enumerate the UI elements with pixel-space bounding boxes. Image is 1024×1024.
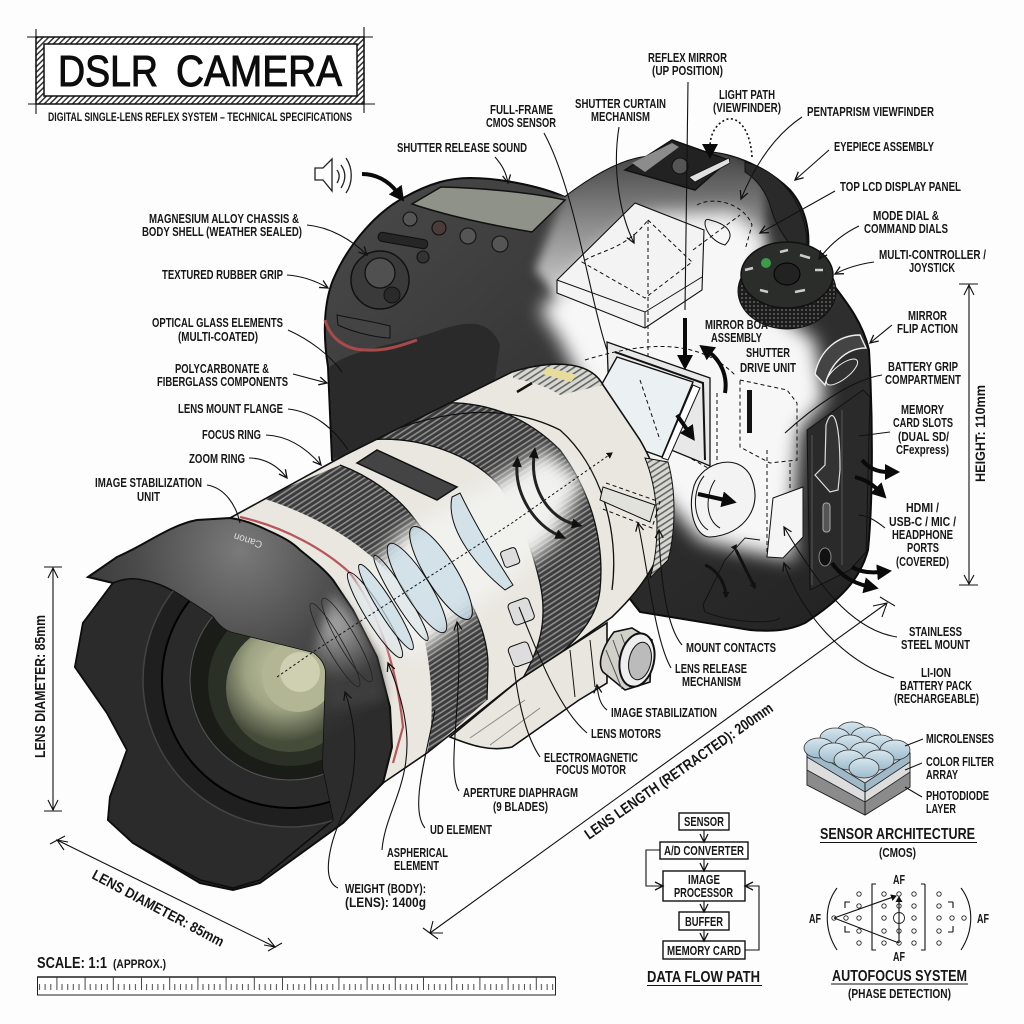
sensor block [804,722,910,815]
label: electromagnetic motor: ELECTROMAGNETIC [544,751,638,765]
AF field arcs and brackets [827,884,971,950]
label: microlenses: MICROLENSES [926,732,994,746]
arrow: base 1 [705,565,726,597]
label: UD element: UD ELEMENT [430,823,492,837]
label: polycarbonate: FIBERGLASS COMPONENTS [157,375,288,389]
arrow: port 1 [852,567,880,572]
AF labels: AF [809,912,821,926]
label: stainless mount: STAINLESS [909,625,962,639]
label: mode dial: COMMAND DIALS [864,222,948,236]
hood brand: Canon [233,530,264,550]
label: lens motors: LENS MOTORS [591,727,661,741]
label: optical glass [152,316,342,372]
cutaway white area [540,212,825,560]
top LCD [412,187,565,232]
heading: (PHASE DETECTION) [848,987,951,1001]
IS rail [600,483,660,528]
flow arrows [646,830,759,950]
label: battery pack: BATTERY PACK [900,679,972,693]
label: mount contacts [659,530,776,655]
label: memory slots: MEMORY [901,403,945,417]
thin ghost elements [304,594,379,691]
label: image stabilization [597,685,717,720]
label: focus ring: FOCUS RING [202,428,261,442]
label: aperture [454,622,578,814]
label: eyepiece [795,140,934,180]
scale: (APPROX.) [113,959,166,971]
label: image stabilization unit: UNIT [137,490,160,504]
label: mount contacts: MOUNT CONTACTS [686,641,776,655]
battery shape [767,487,803,558]
label: memory slots [859,403,953,457]
label: light path [713,88,781,115]
diagram: data flow path [646,813,762,986]
label: light path: (VIEWFINDER) [713,101,781,115]
label: lens release [638,523,747,689]
box: memory card [663,941,745,959]
label: shutter drive: DRIVE UNIT [740,361,796,375]
label: ports: HEADPHONE [892,528,953,542]
tripod foot [450,623,659,749]
label: battery pack: (RECHARGEABLE) [894,692,979,706]
label: stainless mount [784,527,970,652]
label: aspherical: ELEMENT [394,859,439,873]
mode dial [738,242,836,329]
box: converter: A/D CONVERTER [664,844,744,858]
label: magnesium alloy: BODY SHELL (WEATHER SEALED) [142,225,302,239]
arrow: centre body [698,494,725,500]
right hump shading [535,145,825,560]
right callouts [784,309,979,706]
rear lens mount ring [645,458,674,578]
label: photodiode: PHOTODIODE [926,789,989,803]
label: zoom ring [189,452,287,478]
label: electromagnetic motor [514,667,638,777]
hood highlight [313,590,385,710]
rib ring 2 [367,403,601,683]
label: mirror box [705,318,768,345]
label: memory slots: CARD SLOTS [893,416,953,430]
ruler [37,977,556,995]
lens barrel [230,363,674,784]
arrow: base 2 [736,550,755,588]
label: top LCD: TOP LCD DISPLAY PANEL [840,180,961,194]
label: aspherical [382,663,448,873]
label: battery pack: LI-ION [921,666,951,680]
heading [820,826,977,860]
heading: AUTOFOCUS SYSTEM [832,968,967,985]
joystick [351,251,409,309]
box: sensor [679,813,729,830]
lower callouts [328,523,776,910]
label: battery grip: COMPARTMENT [885,373,961,387]
diagram: sensor architecture [804,722,994,860]
label: mirror flip [870,309,958,343]
label: rubber grip [162,268,328,288]
label: top LCD [760,180,961,233]
label: full-frame sensor: FULL-FRAME [490,103,553,117]
label: stainless mount: STEEL MOUNT [901,638,970,652]
label: mirror box: MIRROR BOA [705,318,768,332]
dimension: lens diameter vertical: LENS DIAMETER: 85mm [33,615,49,758]
hood interior [75,579,333,888]
label: pentaprism [741,105,934,199]
label: color filter: ARRAY [926,768,958,782]
internal dashed parts [585,346,803,622]
label: multi-controller: JOYSTICK [909,261,955,275]
box: sensor: SENSOR [684,815,724,829]
arrow: card 1 [862,460,888,472]
red grip line [325,320,417,350]
label: focus ring [202,428,321,465]
subtitle: DIGITAL SINGLE-LENS REFLEX SYSTEM – TECHNICAL SPECIFICATIONS [48,112,352,124]
label: mirror box: ASSEMBLY [711,331,762,345]
label: image stabilization: IMAGE STABILIZATION [611,706,717,720]
label: magnesium alloy [142,212,367,255]
label: weight: (LENS): 1400g [345,895,426,910]
dimension: lens diameter diagonal: LENS DIAMETER: 85mm [89,867,226,951]
label: mirror flip: MIRROR [908,309,947,323]
AF labels [809,873,989,964]
hot shoe [625,140,730,190]
label: battery grip [785,360,961,433]
label: battery pack [784,563,979,706]
label: shutter curtain: MECHANISM [591,110,650,124]
label: lens release: MECHANISM [682,675,741,689]
box: buffer [679,912,729,930]
inner callouts [705,318,796,375]
yellow scale window [542,367,577,382]
front glass [142,590,333,828]
label: lens motors [519,607,661,741]
pentaprism ghost [557,201,752,440]
heading: SENSOR ARCHITECTURE [820,826,975,843]
box: processor [663,871,745,901]
label: weight [328,692,426,910]
rear ribbed collar [513,364,603,395]
shutter circle [691,462,755,537]
label: magnesium alloy: MAGNESIUM ALLOY CHASSIS & [149,212,299,226]
lens elements [341,493,513,662]
mirror assembly [578,342,710,466]
scale: SCALE: 1:1 [37,955,107,972]
arrow: port 2 [832,563,867,586]
lens hood [74,517,393,891]
label: light path: LIGHT PATH [719,88,775,102]
heading: (CMOS) [879,845,916,860]
label: battery grip: BATTERY GRIP [888,360,958,374]
label: image stabilization unit: IMAGE STABILIZATION [95,476,202,490]
label: photodiode [905,787,989,816]
red ring [240,517,403,763]
label: full-frame sensor [486,103,607,350]
box: memory card: MEMORY CARD [667,944,741,958]
motion arrows [362,119,888,597]
label: memory slots: (DUAL SD/ [898,430,949,444]
locking knob [601,628,659,690]
title: CAMERA [176,47,343,96]
label: reflex mirror [648,51,727,310]
dimension: height: HEIGHT: 110mm [972,385,988,482]
arrow: mirror up [709,352,726,393]
label: electromagnetic motor: FOCUS MOTOR [556,763,626,777]
arrow: mirror drop [683,318,687,358]
dimension: height [959,284,988,585]
label: ports [859,501,956,569]
left callouts [95,141,527,523]
dimension: lens length [423,597,895,939]
label: polycarbonate [157,362,327,389]
barrel base [233,372,656,781]
label: shutter curtain: SHUTTER CURTAIN [575,97,666,111]
AF points [832,892,966,945]
heading [831,968,968,1001]
arrow: card 2 [855,477,878,490]
eyepiece [745,162,807,255]
title block [27,27,375,114]
label: optical glass: (MULTI-COATED) [178,330,258,344]
top callouts [486,51,986,350]
label: lens release: LENS RELEASE [675,662,747,676]
label: ports: USB-C / MIC / [889,515,956,529]
hood shell [75,518,392,890]
label: optical glass: OPTICAL GLASS ELEMENTS [152,316,283,330]
barrel outline [230,364,665,783]
label: microlenses [905,732,994,746]
label: color filter [905,755,994,782]
box: converter [660,842,748,859]
label: shutter drive [740,346,796,375]
AF labels: AF [977,912,989,926]
label: polycarbonate: POLYCARBONATE & [175,362,269,376]
label: lens mount flange [178,402,348,450]
camera body [325,140,872,631]
label: pentaprism: PENTAPRISM VIEWFINDER [807,105,934,119]
lens switches [500,547,535,668]
rib ring 1 [262,465,488,753]
arrow: sound to body [362,174,397,192]
ring outlines [340,403,614,700]
diagram: autofocus system [809,873,989,1001]
label: eyepiece: EYEPIECE ASSEMBLY [834,140,934,154]
box: buffer: BUFFER [685,915,723,929]
tick [517,383,532,392]
AF labels: AF [893,873,905,887]
label: rubber grip: TEXTURED RUBBER GRIP [162,268,283,282]
label: ports: PORTS [907,541,939,555]
label: aperture: (9 BLADES) [493,800,548,814]
side doors [807,335,870,590]
label: color filter: COLOR FILTER [926,755,994,769]
optical axis [277,453,612,677]
dimension: lens diameter diagonal [50,836,282,951]
lens window [357,450,457,500]
label: mode dial: MODE DIAL & [873,209,939,223]
box: processor: PROCESSOR [674,886,733,900]
label: multi-controller: MULTI-CONTROLLER / [879,248,986,262]
label: shutter release sound: SHUTTER RELEASE SOUND [397,141,527,155]
label: weight: WEIGHT (BODY): [345,882,426,896]
label: zoom ring: ZOOM RING [189,452,245,466]
dimension: lens diameter vertical [33,567,62,811]
AF arrows [834,896,899,943]
icon: speaker [315,158,351,193]
label: aperture: APERTURE DIAPHRAGM [463,786,578,800]
front wheel [337,315,390,338]
heading: DATA FLOW PATH [647,969,760,986]
label: ports: (COVERED) [896,555,949,569]
label: reflex mirror: REFLEX MIRROR [648,51,727,65]
grip texture [329,324,500,458]
label: mode dial [819,209,948,259]
label: image stabilization unit [95,476,240,523]
label: memory slots: CFexpress) [896,443,949,457]
ghost cutaway [352,450,585,655]
label: photodiode: LAYER [926,802,956,816]
label: shutter curtain [575,97,666,243]
label: ports: HDMI / [906,501,939,515]
box: processor: IMAGE [688,873,720,887]
arrow: lens rotation 1 [517,465,558,535]
label: shutter drive: SHUTTER [746,346,790,360]
arrow: mirror flip [677,415,688,431]
light path dotted [710,119,752,157]
scale [37,955,556,995]
label: aspherical: ASPHERICAL [387,846,448,860]
arrow: lens rotation 2 [533,456,574,524]
label: reflex mirror: (UP POSITION) [652,64,723,78]
label: multi-controller [835,248,986,275]
label: UD element [419,710,492,837]
AF labels: AF [893,950,905,964]
label: lens mount flange: LENS MOUNT FLANGE [178,402,283,416]
top buttons [378,212,508,263]
label: mirror flip: FLIP ACTION [897,322,958,336]
label: full-frame sensor: CMOS SENSOR [486,116,556,130]
dimension: lens length: LENS LENGTH (RETRACTED): 200mm [582,700,776,843]
body shell [325,152,872,631]
title block: DSLR [58,47,158,96]
label: shutter release sound [397,141,527,183]
